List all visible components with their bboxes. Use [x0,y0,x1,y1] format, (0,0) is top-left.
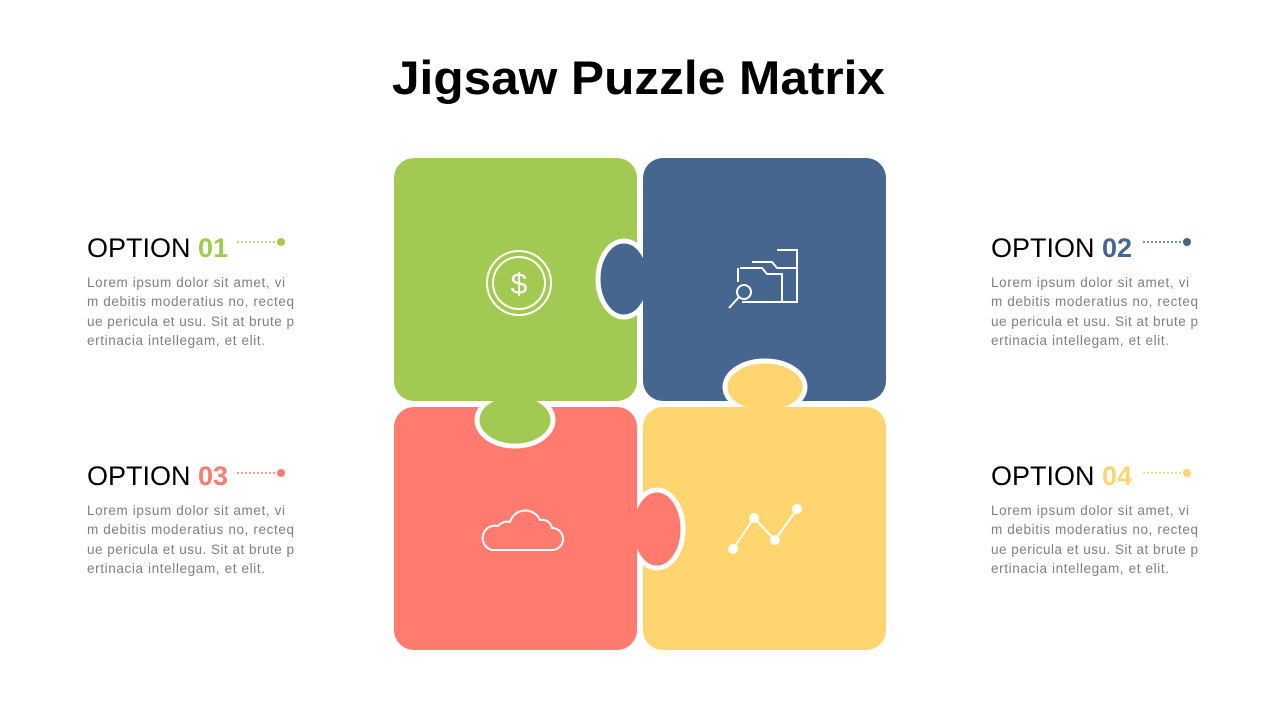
option 03: Lorem ipsum dolor sit amet, vi [87,503,285,518]
option 02: ertinacia intellegam, et elit. [991,333,1169,348]
icon: cloud [483,510,563,550]
knob: blue into green [598,241,650,317]
option 01: ertinacia intellegam, et elit. [87,333,265,348]
option 01: m debitis moderatius no, recteq [87,294,294,309]
option 04: OPTION 04 [991,461,1132,491]
option 02: Lorem ipsum dolor sit amet, vi [991,275,1189,290]
option 04: m debitis moderatius no, recteq [991,522,1198,537]
knob: green into red [477,394,553,446]
option 03: ue pericula et usu. Sit at brute p [87,542,294,557]
option 01: Lorem ipsum dolor sit amet, vi [87,275,285,290]
option 03 [87,461,294,576]
piece: blue [643,158,886,401]
option 04 [991,461,1198,576]
option 04: ertinacia intellegam, et elit. [991,561,1169,576]
option 02: m debitis moderatius no, recteq [991,294,1198,309]
title: Jigsaw Puzzle Matrix [392,51,885,104]
piece: yellow [643,407,886,650]
icon: folder search [729,250,797,308]
knob: yellow into blue [725,361,805,413]
option 04: Lorem ipsum dolor sit amet, vi [991,503,1189,518]
icon: line chart [729,505,801,553]
option 01: ue pericula et usu. Sit at brute p [87,314,294,329]
icon: dollar: $ [511,268,528,301]
option 04: ue pericula et usu. Sit at brute p [991,542,1198,557]
option 02: OPTION 02 [991,233,1132,263]
knob: red into yellow [600,480,683,580]
piece: green [394,158,637,401]
option 01: OPTION 01 [87,233,228,263]
option 02 [991,233,1198,348]
option 02: ue pericula et usu. Sit at brute p [991,314,1198,329]
option 03: m debitis moderatius no, recteq [87,522,294,537]
puzzle matrix [394,158,886,650]
option 03: ertinacia intellegam, et elit. [87,561,265,576]
icon: dollar [487,251,551,315]
piece: red [394,407,637,650]
option 03: OPTION 03 [87,461,228,491]
option 01 [87,233,294,348]
